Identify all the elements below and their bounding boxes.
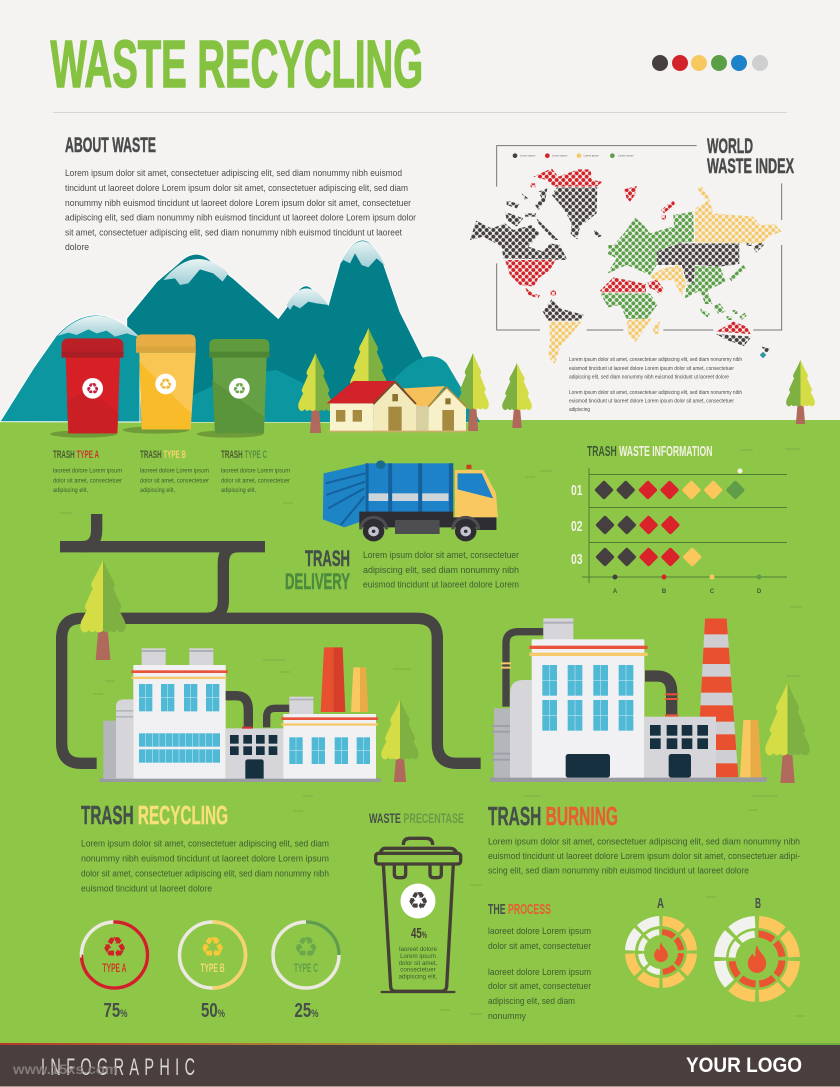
chart row labels: 03 — [571, 551, 582, 568]
text block: about waste: dolore — [65, 242, 89, 252]
text block: recycling: euismod tincidunt ut laoreet dolore — [81, 884, 212, 894]
striped chimney — [700, 618, 738, 778]
panel: trash types — [53, 449, 291, 494]
mountain: left — [0, 315, 140, 422]
chart axis dots and letters — [612, 574, 762, 595]
stat: 45%: 45% — [411, 925, 427, 942]
text block: delivery: adipiscing elit, sed diam nonummy nibh — [363, 565, 519, 575]
text block: bin: adipiscing elit, — [399, 974, 438, 980]
ring: type b: TYPE B — [200, 961, 225, 975]
chart axis dots and letters: B — [662, 589, 667, 595]
text block: process: dolor sit amet, consectetuer — [488, 981, 591, 991]
stat: 25%: 25% — [294, 1000, 319, 1022]
text block: recycling: nonummy nibh euismod tincidunt ut laoreet dolore Lorem ipsum — [81, 854, 329, 864]
panel: trash bins — [50, 334, 269, 438]
text block: map notes: Lorem ipsum dolor sit amet, consectetuer adipiscing elit, sed diam nonummy nibh — [569, 357, 742, 363]
illustration: burning factory — [490, 618, 767, 782]
map accent: teal dot — [760, 352, 766, 358]
chart row labels — [571, 482, 582, 568]
panel: waste percentage — [369, 810, 464, 992]
panel: trash burning — [488, 801, 809, 1021]
text block: burning: euismod tincidunt ut laoreet dolore Lorem ipsum dolor sit amet, consectetuer adipi- — [488, 851, 800, 861]
icon: tree — [298, 353, 333, 433]
heading: the process: THE PROCESS — [488, 901, 551, 918]
text block: type c: laoreet dolore Lorem ipsum — [221, 468, 290, 474]
heading: trash delivery: DELIVERY — [285, 569, 350, 594]
panel: world waste index — [470, 134, 794, 413]
chart row labels: 01 — [571, 482, 582, 499]
footer logo: YOUR LOGO — [686, 1054, 802, 1077]
factory windows — [139, 684, 220, 763]
panel: trash delivery — [285, 546, 519, 594]
ring: type b: ♻ — [200, 931, 225, 964]
chart row labels: 02 — [571, 518, 582, 535]
text block: map notes — [569, 357, 742, 413]
text block: type c — [221, 468, 291, 494]
text block: about waste — [65, 168, 416, 252]
stat: 75%: 75% — [104, 1000, 128, 1022]
text block: process: dolor sit amet, consectetuer — [488, 941, 591, 951]
icon: red bin — [62, 338, 123, 433]
ring: type a: ♻ — [102, 931, 127, 964]
map legend: Lorem ipsum — [520, 154, 536, 158]
text block: process — [488, 926, 591, 1021]
text block: type a: dolor sit amet, consectetuer — [53, 478, 123, 484]
icon: yellow bin — [136, 334, 196, 429]
mountains — [0, 240, 480, 422]
map region: green — [600, 212, 747, 320]
text block: about waste: Lorem ipsum dolor sit amet, consectetuer adipiscing elit, sed diam nonummy nibh euismod — [65, 168, 402, 178]
donut: a — [617, 908, 705, 996]
label: type c: TRASH TYPE C — [221, 449, 267, 461]
text block: about waste: adipiscing elit, sed diam nonummy nibh euismod tincidunt ut laoreet dolore Lorem ipsum dolor — [65, 212, 416, 222]
panel: trash waste information chart — [571, 443, 787, 595]
icon: flame b — [748, 945, 766, 973]
text block: map notes: euismod tincidunt ut laoreet dolore Lorem ipsum dolor sit amet, consectetuer — [569, 398, 734, 404]
text block: map notes: adipiscing elit, sed diam nonummy nibh euismod tincidunt ut laoreet dolore — [569, 374, 729, 380]
icon: tree right of factory — [765, 683, 810, 783]
text block: map notes: Lorem ipsum dolor sit amet, consectetuer adipiscing elit, sed diam nonummy nibh — [569, 390, 742, 396]
illustration: recycling factory — [99, 647, 381, 782]
heading: trash burning: TRASH BURNING — [488, 801, 618, 831]
icon: large tree on road — [80, 560, 126, 660]
icon: tree beside factory — [381, 700, 419, 782]
background: page — [0, 0, 840, 421]
title: WASTE RECYCLING — [50, 27, 423, 102]
text block: type c: adipiscing elit, — [221, 487, 256, 494]
heading: world waste index: WORLD — [707, 134, 753, 158]
icon: tree — [502, 363, 532, 428]
text block: bin: laoreet dolore — [399, 946, 437, 953]
icon: red bin: ♻ — [86, 380, 100, 398]
text block: about waste: tincidunt ut laoreet dolore Lorem ipsum dolor sit amet, consectetuer adipiscing elit, sed diam — [65, 183, 408, 193]
text block: burning — [488, 836, 800, 876]
chart row 02 — [595, 515, 680, 535]
text block: type b: adipiscing elit, — [140, 487, 175, 494]
label: b: B — [755, 895, 761, 912]
text block: bin: dolor sit amet, — [399, 960, 438, 967]
text block: process: nonummy — [488, 1011, 526, 1021]
heading: trash delivery — [285, 546, 350, 594]
ring: type c: TYPE C — [294, 961, 318, 975]
text block: about waste: nonummy nibh euismod tincidunt ut laoreet dolore Lorem ipsum dolor sit amet, consectetuer — [65, 198, 411, 208]
chart axis dots and letters: D — [757, 589, 762, 595]
icon: garbage truck — [323, 460, 498, 541]
text block: bin — [399, 946, 438, 980]
stat: 50%: 50% — [201, 1000, 225, 1022]
map legend: Lorem ipsum — [584, 154, 600, 158]
ring: type b — [180, 922, 246, 988]
text block: process: laoreet dolore Lorem ipsum — [488, 926, 591, 936]
chart marker — [738, 468, 742, 474]
footer label: infographic: INFOGRAPHIC — [41, 1054, 200, 1081]
text block: delivery: euismod tincidunt ut laoreet dolore Lorem — [363, 580, 519, 590]
text block: process: adipiscing elit, sed diam — [488, 996, 575, 1006]
map legend: Lorem ipsum — [552, 154, 568, 158]
chart row 01 — [594, 480, 745, 500]
text block: bin: consectetuer — [400, 966, 436, 974]
footer — [0, 1043, 840, 1087]
icon: recycling badge — [400, 884, 436, 918]
icon: green bin — [209, 339, 269, 433]
map region: high waste dark — [470, 187, 770, 354]
text block: recycling: dolor sit amet, consectetuer adipiscing elit, sed diam nonummy nibh — [81, 868, 329, 878]
map legend — [513, 153, 634, 158]
ring: type c — [273, 922, 339, 988]
chart row 03 — [595, 547, 702, 567]
icon: bin outline — [376, 838, 461, 992]
donut: b — [705, 907, 809, 1011]
icon: recycling badge: ♻ — [407, 887, 429, 915]
road network — [60, 514, 481, 763]
mountain snow caps — [57, 241, 385, 337]
text block: delivery — [363, 550, 519, 590]
text block: burning: Lorem ipsum dolor sit amet, consectetuer adipiscing elit, sed diam nonummy nibh — [488, 836, 800, 846]
text block: type b: dolor sit amet, consectetuer — [140, 478, 210, 484]
icon: yellow bin: ♻ — [159, 376, 173, 394]
text block: type a: laoreet dolore Lorem ipsum — [53, 468, 122, 474]
text block: bin: Lorem ipsum — [400, 953, 436, 960]
text block: about waste: sit amet, consectetuer adipiscing elit, sed diam nonummy nibh euismod tincidunt ut laoreet — [65, 228, 402, 238]
background: grass — [0, 420, 840, 1045]
watermark: www.15xs.com — [12, 1061, 118, 1077]
colour palette dots — [652, 55, 768, 71]
heading: chart: TRASH WASTE INFORMATION — [587, 443, 712, 460]
text block: type a — [53, 468, 123, 494]
text block: process: laoreet dolore Lorem ipsum — [488, 967, 591, 977]
text block: map notes: adipiscing — [569, 407, 590, 413]
chart axis dots and letters: A — [613, 589, 618, 595]
heading: waste percentage: WASTE PRECENTASE — [369, 810, 464, 826]
panel: trash recycling — [80, 800, 339, 1022]
text block: type b — [140, 468, 210, 494]
heading: world waste index — [707, 134, 794, 178]
ring: type a: TYPE A — [102, 961, 127, 975]
heading: about waste: ABOUT WASTE — [65, 134, 156, 157]
icon: green bin: ♻ — [232, 380, 246, 398]
label: a: A — [657, 895, 664, 912]
text block: map notes: euismod tincidunt ut laoreet dolore Lorem ipsum dolor sit amet, consectetuer — [569, 366, 734, 372]
text block: delivery: Lorem ipsum dolor sit amet, consectetuer — [363, 550, 519, 560]
icon: tree far right — [786, 360, 815, 424]
heading: trash recycling: TRASH RECYCLING — [81, 800, 228, 830]
text block: recycling — [81, 838, 329, 894]
ring: type a — [80, 921, 149, 989]
map region: yellow — [548, 186, 782, 364]
world map — [470, 146, 782, 364]
text block: recycling: Lorem ipsum dolor sit amet, consectetuer adipiscing elit, sed diam — [81, 838, 329, 848]
text block: type a: adipiscing elit, — [53, 487, 88, 494]
icon: houses — [327, 381, 468, 432]
text block: burning: scing elit, sed diam nonummy nibh euismod tincidunt ut laoreet dolore — [488, 866, 749, 876]
heading: trash delivery: TRASH — [305, 546, 350, 571]
icon: tree right of houses — [457, 353, 489, 431]
text block: type b: laoreet dolore Lorem ipsum — [140, 468, 209, 474]
chart axis dots and letters: C — [710, 589, 715, 595]
text block: type c: dolor sit amet, consectetuer — [221, 478, 291, 484]
label: type a: TRASH TYPE A — [53, 449, 99, 461]
ring: type c: ♻ — [293, 931, 319, 964]
label: type b: TRASH TYPE B — [140, 449, 186, 461]
icon: flame a — [654, 942, 668, 962]
map legend: Lorem ipsum — [618, 154, 634, 158]
panel: about waste — [65, 134, 416, 252]
icon: tree behind house — [350, 328, 387, 412]
map region: red — [505, 168, 751, 334]
